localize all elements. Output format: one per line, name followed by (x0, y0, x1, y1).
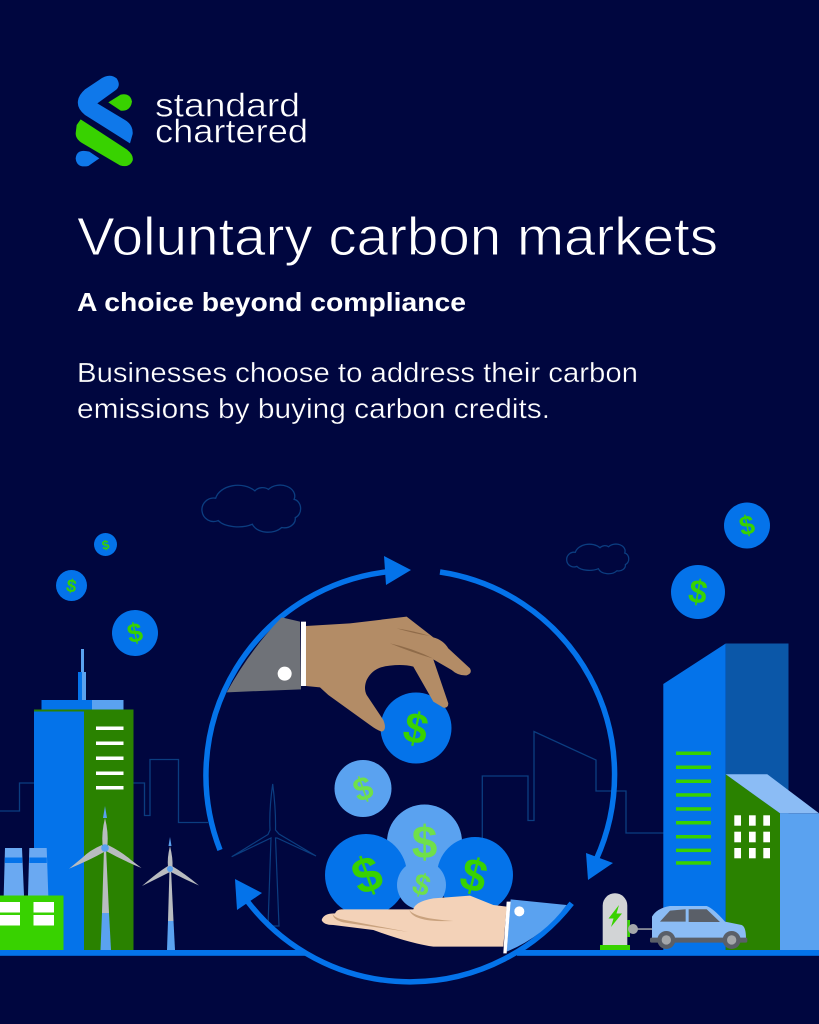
coin: left: $ (344, 844, 390, 906)
floating coin: left small (94, 533, 117, 556)
background skyline outlines (0, 732, 664, 840)
wind turbine outline (232, 784, 316, 926)
coin pile (325, 692, 513, 916)
EV charger (600, 893, 653, 950)
right tall building (663, 644, 788, 950)
arrow: bottom to left (235, 879, 572, 982)
lower hand with sleeve (322, 896, 567, 953)
coin: back light (387, 804, 462, 880)
cloud: left (202, 485, 301, 532)
logo: Standard Chartered (76, 76, 308, 166)
coin: falling light: $ (348, 768, 378, 809)
floating coin: left large: $ (125, 617, 145, 649)
floating coin: right lower (671, 565, 725, 619)
body text: Businesses choose to address their carbon (77, 357, 638, 388)
factory (0, 848, 64, 950)
floating coin: right top (724, 502, 770, 548)
upper hand with sleeve (227, 617, 471, 732)
ground line (0, 950, 819, 956)
left tower building (34, 649, 134, 950)
floating coin: left large (112, 610, 158, 656)
icon: logo mark (76, 76, 133, 166)
title: Voluntary carbon markets (77, 207, 718, 267)
subtitle: A choice beyond compliance (77, 287, 466, 317)
wind turbine: small (142, 837, 199, 950)
right low building (726, 774, 819, 950)
logo wordmark: chartered (155, 113, 308, 150)
circular arrows (206, 556, 615, 982)
wind turbine: large (69, 806, 142, 950)
arrow: top to right (440, 572, 615, 880)
logo wordmark: standard (155, 87, 300, 124)
coin: held in hand (380, 692, 452, 764)
coin: back light: $ (412, 816, 437, 868)
cloud: right (567, 544, 629, 574)
body text (77, 357, 638, 424)
coin: held in hand: $ (399, 703, 433, 755)
coin: front small: $ (408, 867, 435, 904)
arrow: left to top (206, 556, 411, 850)
floating coin: right top: $ (737, 509, 757, 542)
coin: right (437, 837, 513, 913)
floating coin: left medium (56, 570, 87, 601)
logo wordmark (155, 87, 308, 150)
floating coin: left small: $ (101, 537, 111, 553)
body text: emissions by buying carbon credits. (77, 393, 550, 424)
floating coin: left medium: $ (65, 575, 78, 597)
floating coin: right lower: $ (686, 572, 710, 611)
coin: front small (397, 860, 446, 910)
coin: left (325, 834, 407, 916)
coin: falling light (334, 760, 392, 817)
electric car (650, 906, 747, 949)
coin: right: $ (455, 847, 493, 903)
